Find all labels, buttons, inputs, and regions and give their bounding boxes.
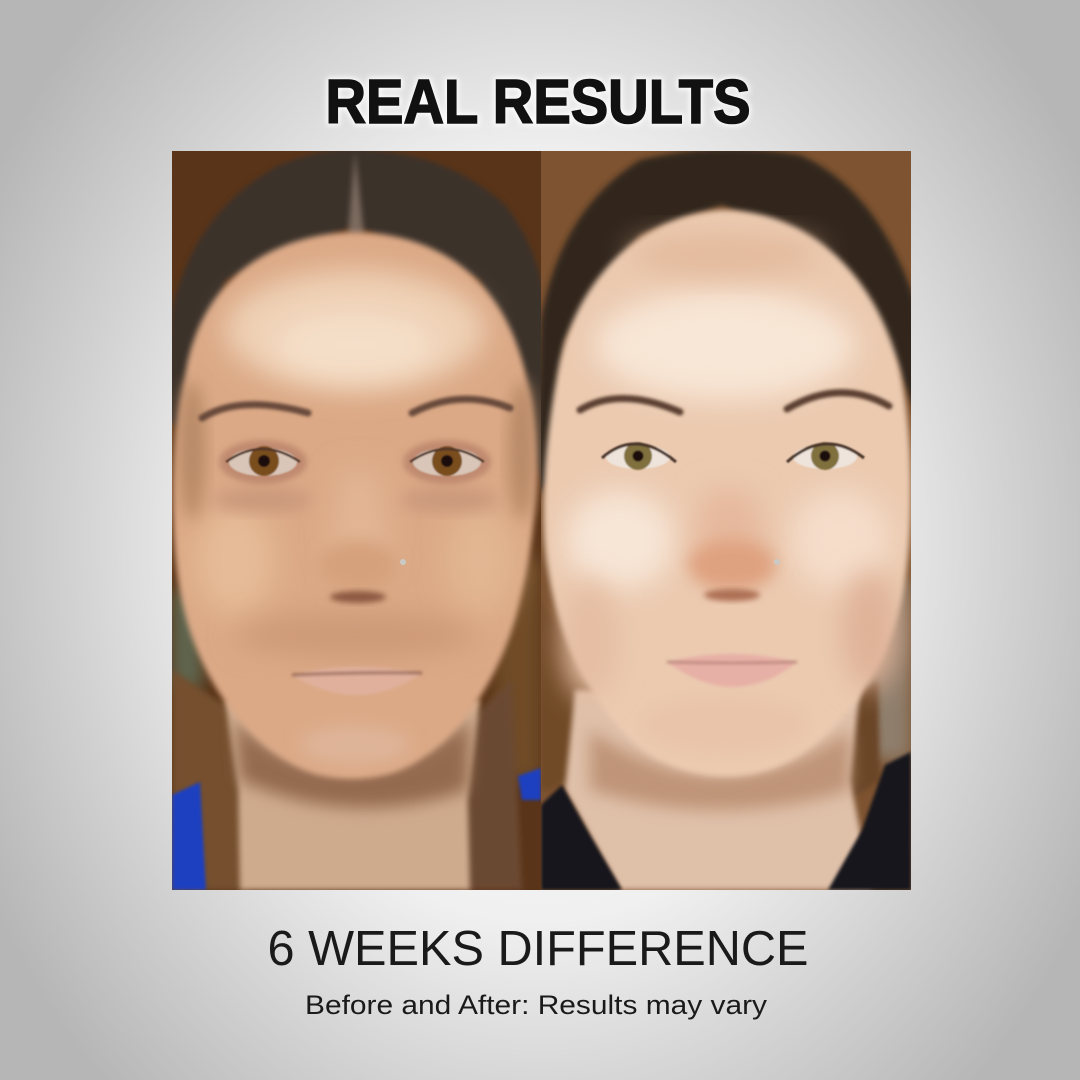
after: hair [535, 149, 918, 500]
after: left eye [602, 442, 676, 470]
after photo [535, 149, 918, 890]
after: jaw shadow [590, 730, 850, 810]
after: long hair [541, 600, 880, 800]
before: right eye [403, 440, 491, 484]
after: eyebrows [580, 393, 889, 412]
disclaimer: Before and After: Results may vary [305, 990, 768, 1020]
before: jaw shadow [235, 720, 470, 808]
before: neck [225, 700, 480, 890]
subtitle: 6 WEEKS DIFFERENCE [268, 922, 808, 976]
after: nose [688, 490, 780, 601]
before: eyebrows [202, 399, 510, 418]
title glow: REAL RESULTS [326, 68, 750, 137]
before: blue top [172, 768, 541, 890]
after: right eye [787, 442, 864, 470]
before: nose [328, 476, 406, 606]
after: neck [565, 690, 872, 890]
title: REAL RESULTS [326, 68, 750, 137]
before: lips [292, 667, 422, 695]
after: background [541, 151, 911, 890]
before: background [172, 151, 541, 890]
before: left eye [219, 440, 307, 484]
before: hair [165, 149, 548, 500]
before: long hair [172, 670, 522, 890]
after: skin shading [562, 235, 898, 755]
after: lips [667, 654, 797, 687]
before: skin shading [178, 270, 536, 765]
after: face [544, 210, 911, 776]
after: black top [541, 752, 911, 890]
before: face [173, 232, 536, 779]
before photo [165, 149, 548, 890]
